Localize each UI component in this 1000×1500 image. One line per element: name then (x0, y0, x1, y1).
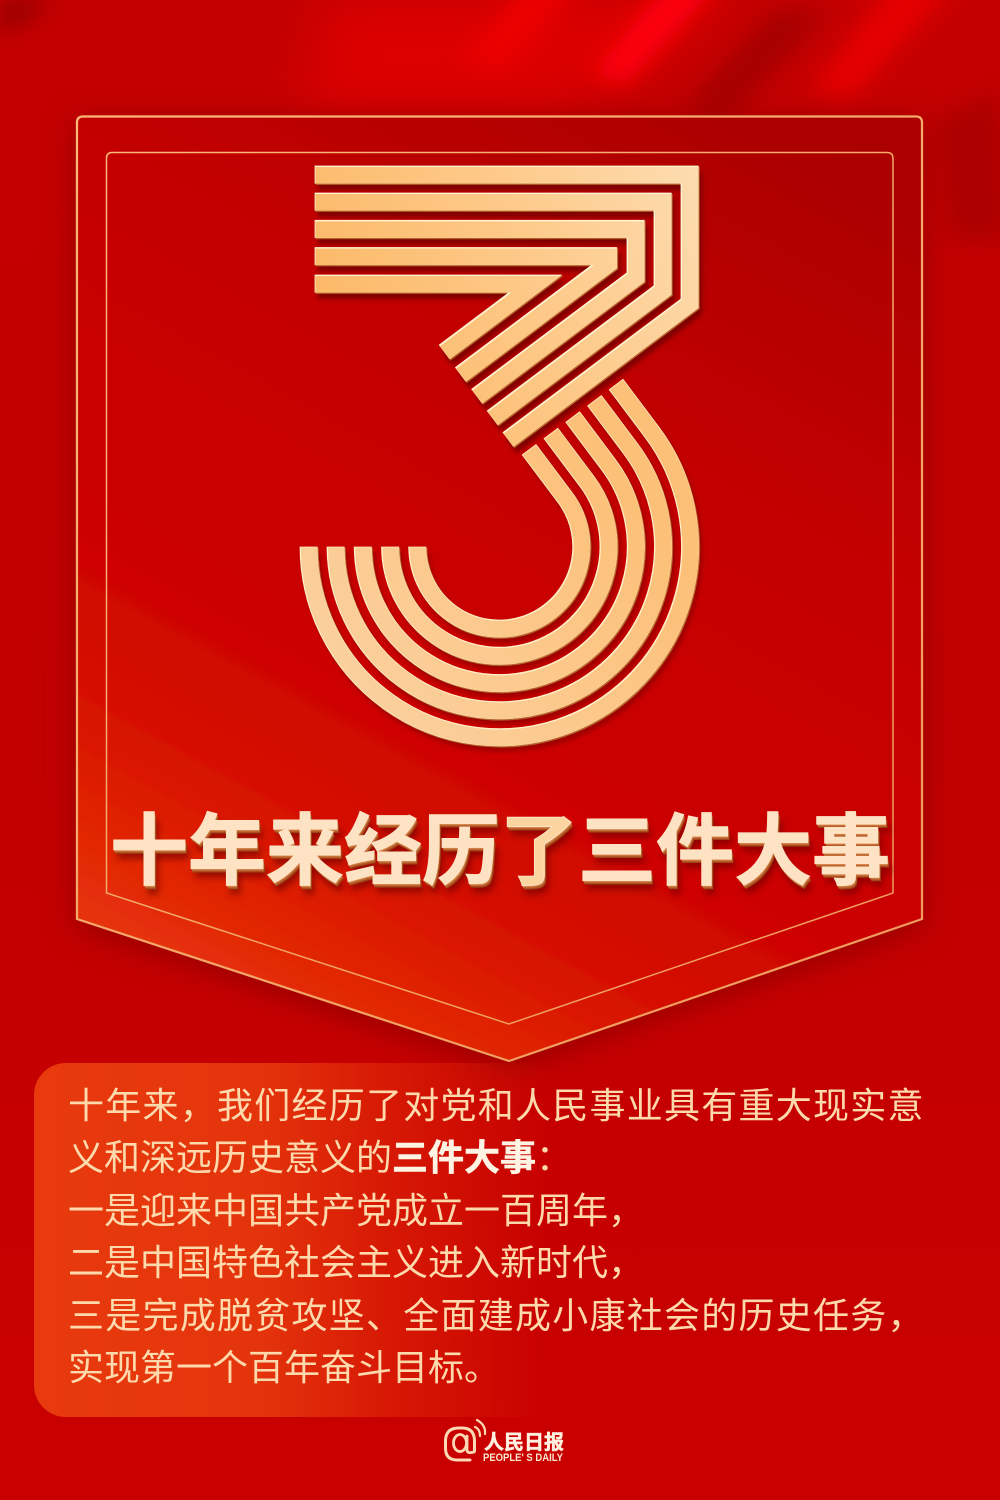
logo chinese wordmark: 人民日报 (484, 1431, 564, 1454)
banner inner frame (106, 152, 893, 1024)
body text: 实现第一个百年奋斗目标。 (68, 1347, 500, 1388)
body text: 二是中国特色社会主义进入新时代， (68, 1242, 644, 1283)
body text: 十年来，我们经历了对党和人民事业具有重大现实意 (68, 1085, 925, 1126)
body text: 三是完成脱贫攻坚、全面建成小康社会的历史任务， (68, 1295, 925, 1336)
icon: at sign with signal waves (446, 1420, 485, 1460)
title: 十年来经历了三件大事 (110, 807, 890, 895)
body text (68, 1085, 925, 1388)
lower concentric arcs of the 3 (309, 384, 693, 743)
body text: 一是迎来中国共产党成立一百周年， (68, 1190, 644, 1231)
logo english wordmark: PEOPLE' S DAILY (483, 1452, 564, 1464)
body text: 义和深远历史意义的三件大事： (68, 1137, 572, 1178)
banner outer frame (77, 116, 922, 1061)
top chevron bars of the 3 (315, 175, 693, 446)
text panel background (34, 1063, 594, 1417)
